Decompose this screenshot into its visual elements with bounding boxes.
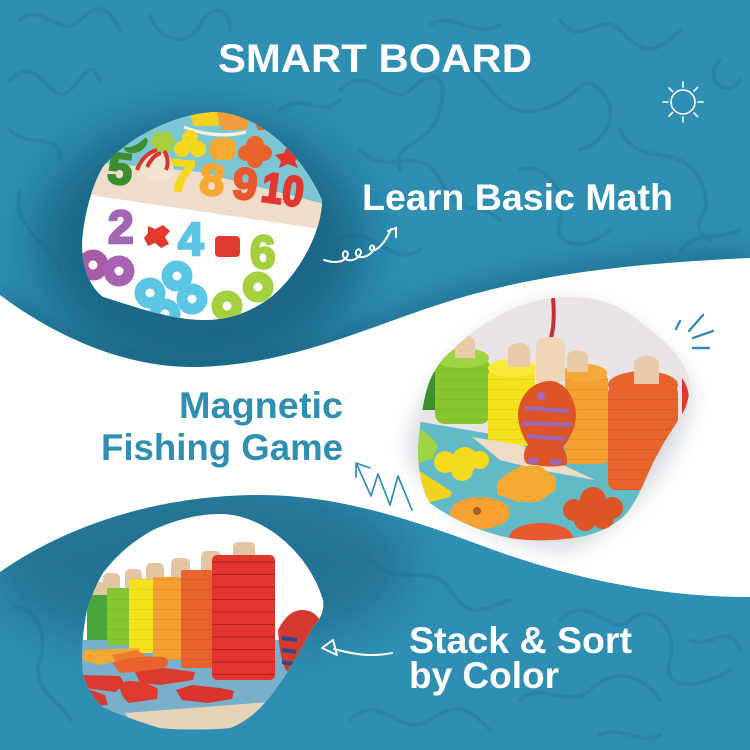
panel: stacking photo: [82, 514, 324, 730]
left stacks: [420, 336, 689, 490]
equation 2 x 4 = 6: 2: [108, 201, 134, 253]
shadow above wave: [0, 248, 750, 420]
arrow: squiggle to math: [324, 228, 396, 262]
label: Magnetic Fishing Game: [101, 385, 343, 468]
label: Magnetic Fishing Game: Fishing Game: [101, 427, 343, 468]
top cups: [184, 112, 266, 136]
white wave band: [0, 258, 750, 597]
equation 2 x 4 = 6: 6: [250, 226, 276, 278]
shadow beneath stack blob: [0, 475, 410, 655]
pegs: [92, 542, 255, 596]
label: Stack and Sort by Color: by Color: [409, 655, 559, 696]
fishing string: [551, 298, 554, 338]
fish side: [278, 610, 322, 674]
arrow: zigzag to fishing: [356, 463, 412, 510]
label: Learn Basic Math: Learn Basic Math: [362, 177, 673, 218]
label: Stack and Sort by Color: Stack & Sort: [409, 620, 632, 661]
arrow: to stack photo: [322, 640, 392, 655]
fish: [518, 381, 576, 466]
board beige band: [91, 163, 322, 228]
board numbers: 9: [230, 159, 260, 210]
icon: sun: [663, 82, 703, 122]
title: SMART BOARD: [218, 37, 532, 81]
rings: [83, 255, 268, 324]
base wedge: [472, 437, 595, 480]
board numbers: 8: [197, 155, 227, 206]
board numbers: 5: [105, 144, 135, 195]
teal board: [418, 422, 654, 540]
fishing peg: [536, 337, 565, 384]
colored stacks: [87, 555, 275, 680]
shadow around fishing blob: [410, 305, 690, 548]
equation 2 x 4 = 6: 4: [178, 213, 204, 265]
board numbers: 7: [167, 151, 197, 202]
blue board: [82, 640, 306, 730]
board numbers: [107, 152, 304, 208]
equation 2 x 4 = 6: [108, 209, 276, 270]
shadow around math blob: [35, 115, 365, 375]
panel: fishing photo: [418, 298, 690, 540]
label: Stack and Sort by Color: [409, 620, 632, 696]
board sky: [94, 112, 322, 222]
red shapes: [82, 648, 234, 706]
puzzle shapes: [418, 429, 623, 540]
panel: math photo: [82, 112, 322, 320]
wooden base: [125, 702, 266, 730]
board shapes: [124, 130, 298, 171]
board numbers: 10: [259, 163, 307, 216]
label: Magnetic Fishing Game: Magnetic: [179, 385, 343, 426]
icon: sparkle lines: [676, 315, 713, 348]
